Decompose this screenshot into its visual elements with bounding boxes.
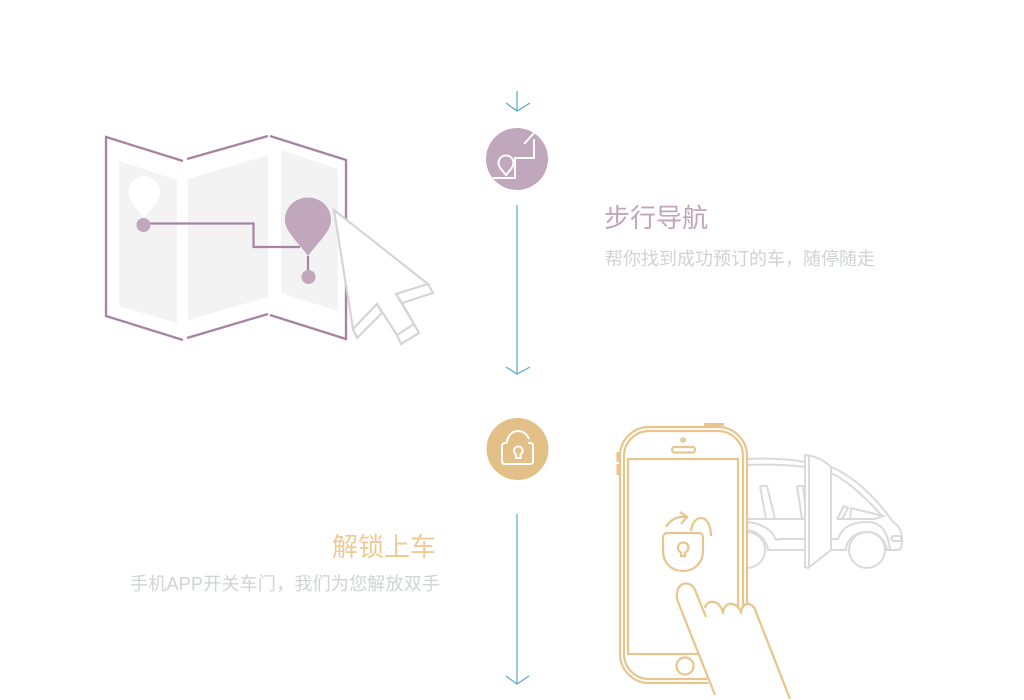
arrow: middle [506, 205, 530, 374]
arrow: bottom [506, 514, 529, 684]
destination pin [285, 198, 331, 256]
phone body [620, 427, 747, 683]
phone side buttons [618, 424, 724, 475]
start pin [128, 176, 160, 218]
text: walking navigation description: 帮你找到成功预订的车，随停随走 [605, 249, 875, 269]
home button [676, 658, 694, 674]
arrow: top [506, 91, 530, 111]
destination dot [302, 270, 316, 284]
illustration: phone [618, 424, 790, 700]
illustration: car with open door [729, 455, 902, 568]
pin stem [307, 256, 309, 271]
camera [681, 438, 685, 442]
unlock glyph [663, 512, 711, 571]
start dot [136, 218, 150, 232]
phone screen [628, 459, 738, 654]
icon: walking navigation circle [486, 128, 548, 190]
car door [805, 455, 831, 568]
cursor [334, 210, 433, 344]
hand [677, 583, 790, 700]
map outline [106, 136, 346, 340]
icon: unlock circle [486, 418, 548, 480]
map shading panels [119, 150, 338, 323]
speaker [672, 447, 695, 452]
text: unlock description: 手机APP开关车门，我们为您解放双手 [130, 574, 440, 594]
heading: walking navigation: 步行导航 [604, 203, 708, 233]
illustration: folded map with route [106, 136, 433, 344]
heading: unlock and board: 解锁上车 [332, 532, 436, 562]
route line [143, 224, 300, 247]
